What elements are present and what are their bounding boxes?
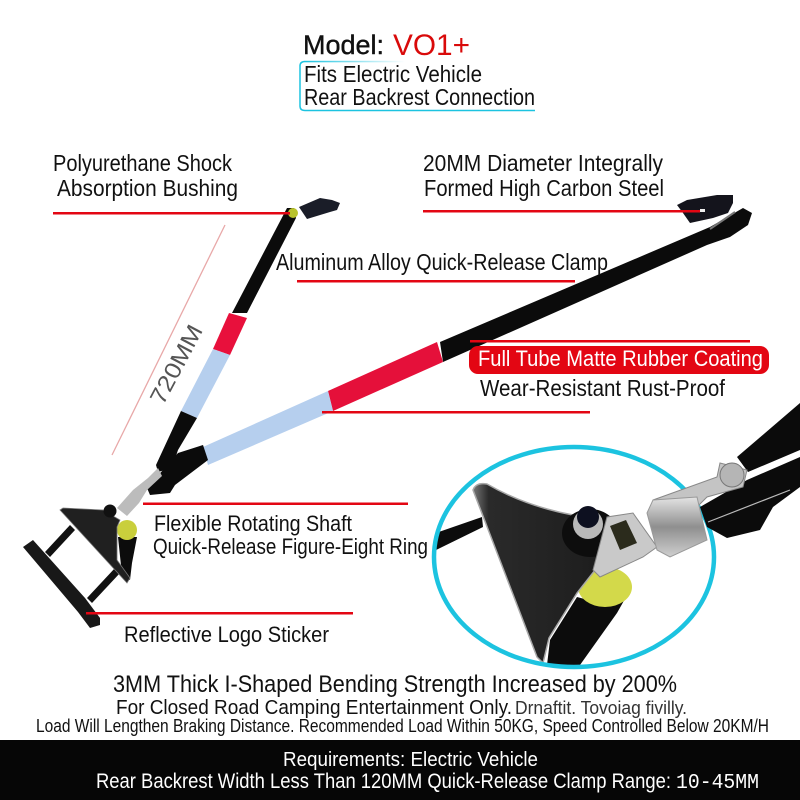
title: model and fit: Model: xyxy=(303,30,384,60)
callout: rubber coating: Wear-Resistant Rust-Proof xyxy=(480,375,726,401)
text block: strength and usage notes xyxy=(36,671,769,736)
product: short arm tube xyxy=(156,198,340,472)
footer band: requirements: Requirements: Electric Vehicle xyxy=(283,749,538,771)
callout: polyurethane bushing: Polyurethane Shock xyxy=(53,150,232,176)
product: long arm tube xyxy=(147,195,752,495)
callout: aluminum clamp: Aluminum Alloy Quick-Release Clamp xyxy=(276,249,608,275)
title: model and fit: VO1+ xyxy=(393,29,470,62)
callout: polyurethane bushing: Absorption Bushing xyxy=(57,175,238,201)
title: model and fit: Rear Backrest Connection xyxy=(304,84,535,110)
right black arm xyxy=(700,403,800,538)
callout: carbon steel xyxy=(423,150,700,212)
zoom circle: swivel detail xyxy=(430,403,800,667)
bolt xyxy=(562,506,618,557)
triangle plate xyxy=(473,484,603,663)
silver swivel xyxy=(593,463,747,577)
text block: strength and usage notes: 3MM Thick I-Shaped Bending Strength Increased by 200% xyxy=(113,671,677,698)
text block: strength and usage notes: Drnaftit. Tovoiag fivilly. xyxy=(515,698,687,718)
callout: rotating shaft: Quick-Release Figure-Eight Ring xyxy=(153,534,428,559)
dimension line: 720MM xyxy=(112,225,225,455)
callout: logo sticker: Reflective Logo Sticker xyxy=(124,622,329,647)
lens ring xyxy=(434,447,714,667)
text block: strength and usage notes: For Closed Road Camping Entertainment Only. xyxy=(116,697,512,719)
footer band: requirements: Rear Backrest Width Less Than 120MM Quick-Release Clamp Range: xyxy=(96,770,671,793)
callout: polyurethane bushing xyxy=(53,150,290,214)
callout: rotating shaft xyxy=(143,502,428,559)
title: model and fit: Fits Electric Vehicle xyxy=(304,61,482,87)
yellow ball xyxy=(578,567,632,607)
callout: rubber coating xyxy=(322,340,769,414)
callout: carbon steel: Formed High Carbon Steel xyxy=(424,175,664,201)
lower black arm xyxy=(547,590,630,665)
footer band: requirements xyxy=(0,740,800,800)
product: quick-release frame xyxy=(23,468,162,628)
callout: carbon steel: 20MM Diameter Integrally xyxy=(423,150,663,176)
title: model and fit xyxy=(300,29,535,110)
icon: long arm clamp xyxy=(677,195,733,223)
icon: short arm clamp xyxy=(299,198,340,219)
callout: rubber coating: Full Tube Matte Rubber Coating xyxy=(478,346,763,371)
dimension line: 720MM: 720MM xyxy=(144,320,208,408)
footer band: requirements: 10-45MM xyxy=(676,772,759,795)
callout: rotating shaft: Flexible Rotating Shaft xyxy=(154,511,352,536)
